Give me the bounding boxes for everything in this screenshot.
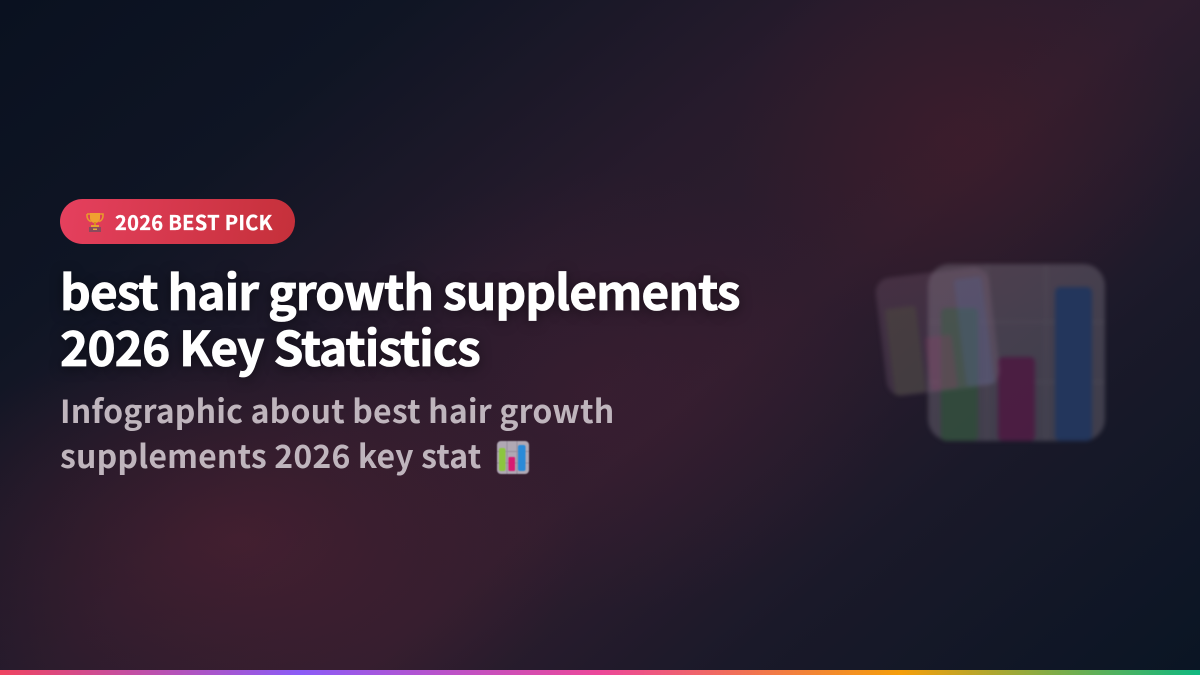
subtitle: supplements 2026 key stat (60, 432, 481, 478)
decorative large chart icon (875, 262, 1107, 443)
pill badge (60, 199, 295, 244)
subtitle (60, 387, 614, 478)
large chart card (928, 264, 1105, 441)
badge text: 2026 BEST PICK (115, 207, 273, 236)
tilted small chart card (874, 266, 1002, 398)
subtitle: Infographic about best hair growth (60, 387, 614, 433)
rainbow bottom bar (0, 670, 1200, 675)
title: 2026 Key Statistics (60, 310, 480, 380)
title: best hair growth supplements (60, 254, 739, 324)
icon: trophy (86, 213, 104, 232)
title (60, 254, 740, 380)
icon: small bar chart emoji (496, 440, 530, 475)
